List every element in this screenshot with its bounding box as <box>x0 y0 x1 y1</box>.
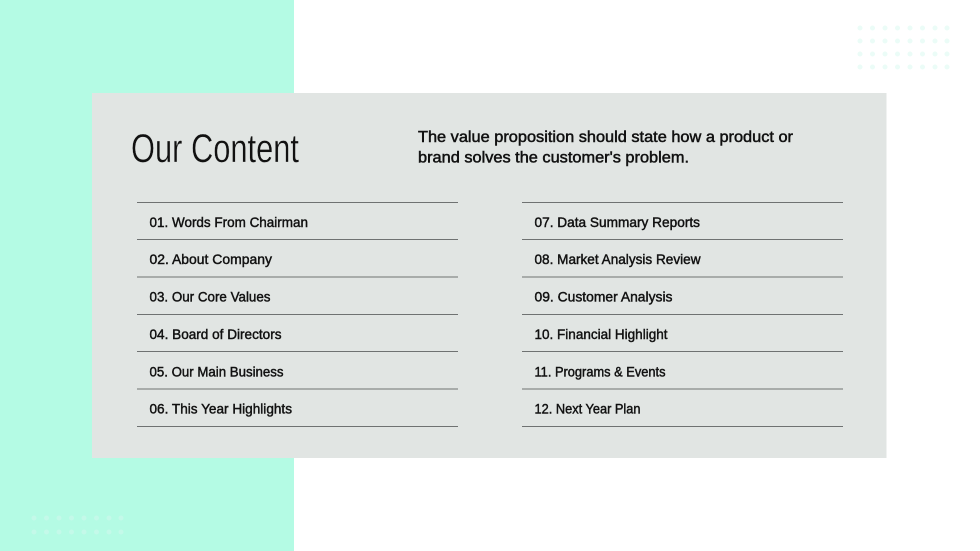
dot pattern: bottom left <box>32 516 124 534</box>
grey content panel <box>92 93 886 458</box>
list: right column: 07. Data Summary Reports <box>534 214 700 230</box>
description <box>418 129 794 166</box>
description: The value proposition should state how a product or <box>418 129 794 146</box>
list: left column: 01. Words From Chairman <box>150 214 308 230</box>
list: right column: 09. Customer Analysis <box>534 288 672 304</box>
description: brand solves the customer's problem. <box>418 150 689 166</box>
list: right column: 12. Next Year Plan <box>534 400 640 416</box>
list: right column: 10. Financial Highlight <box>534 326 668 342</box>
dot pattern: top right <box>858 26 950 70</box>
list: left column: 06. This Year Highlights <box>150 400 292 416</box>
list: left column: 02. About Company <box>150 251 272 267</box>
list: left column: 03. Our Core Values <box>150 288 270 304</box>
list: right column <box>522 202 843 426</box>
mint background panel <box>0 0 294 551</box>
list: left column: 05. Our Main Business <box>150 364 284 380</box>
list: right column: 08. Market Analysis Review <box>534 251 701 267</box>
list: left column <box>137 202 458 426</box>
list: left column: 04. Board of Directors <box>150 326 282 342</box>
list: right column: 11. Programs & Events <box>534 364 666 380</box>
title: Our Content <box>131 127 299 171</box>
